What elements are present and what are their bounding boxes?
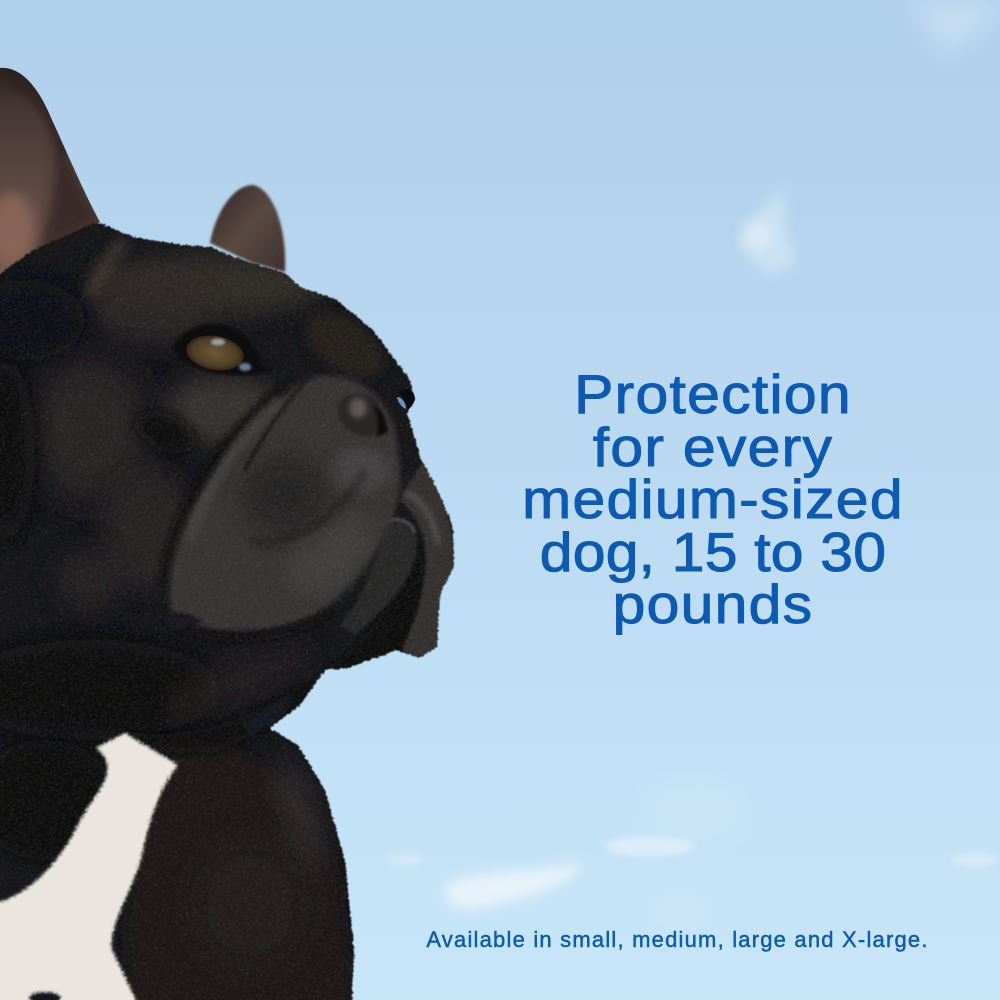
lower lip bbox=[340, 522, 417, 635]
eye bbox=[172, 324, 274, 375]
heading: medium-sized bbox=[522, 468, 904, 530]
heading: Protection bbox=[574, 363, 852, 425]
white chest patch bbox=[0, 733, 178, 1000]
muzzle bbox=[169, 376, 401, 631]
muzzle folds bbox=[162, 385, 285, 590]
clouds bbox=[387, 0, 1000, 928]
heading: dog, 15 to 30 bbox=[540, 520, 886, 582]
dog head and body bbox=[0, 222, 456, 1000]
dark under flap bbox=[325, 540, 430, 672]
heading bbox=[522, 363, 904, 635]
lip flap bbox=[400, 462, 454, 657]
dog far ear bbox=[210, 185, 285, 272]
nose bbox=[338, 393, 388, 437]
heading: for every bbox=[593, 416, 833, 478]
fur shading bbox=[90, 253, 330, 317]
heading: pounds bbox=[613, 573, 813, 635]
far eye glimpse bbox=[397, 389, 415, 410]
fur grain bbox=[0, 222, 454, 1000]
dog near ear bbox=[0, 68, 100, 275]
neck and chest shading bbox=[127, 740, 354, 1000]
footnote: Available in small, medium, large and X-large. bbox=[426, 927, 929, 952]
